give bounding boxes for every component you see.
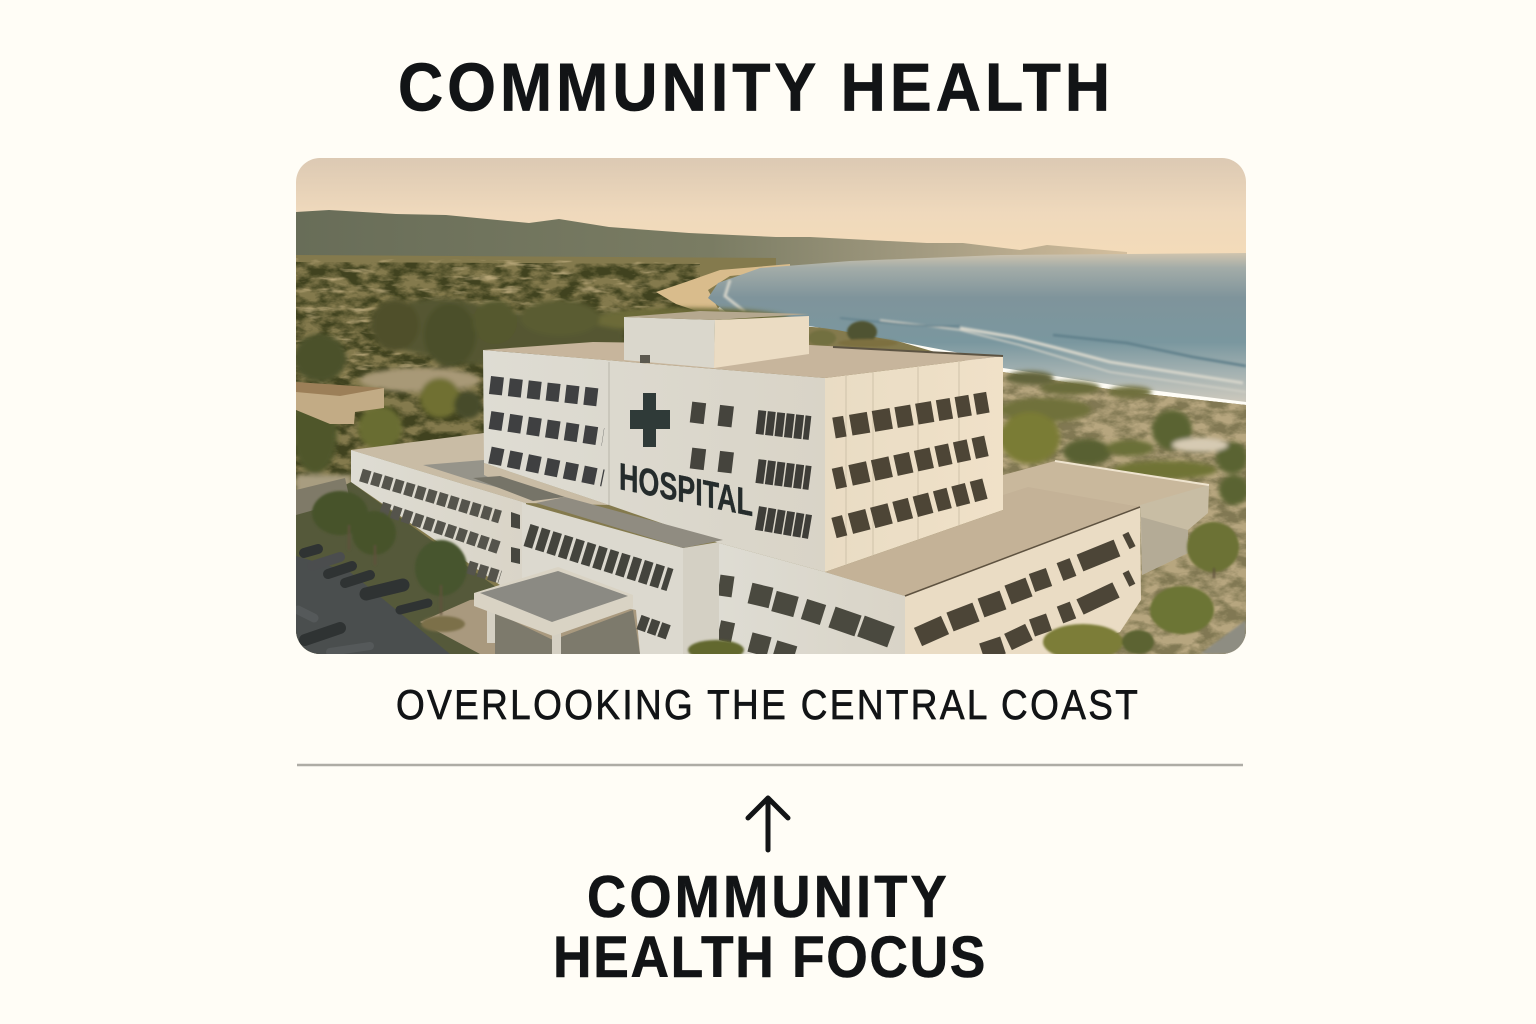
divider line [297, 764, 1243, 766]
parking lot and lawn [296, 478, 640, 654]
title: COMMUNITY HEALTH [398, 49, 1110, 125]
entrance canopy [474, 567, 633, 654]
icon: medical cross [630, 393, 670, 447]
foreground trees [688, 522, 1246, 660]
closing statement [553, 865, 985, 989]
lower right wing [719, 487, 1141, 654]
front entrance block [473, 476, 723, 654]
trees right of hospital [999, 371, 1249, 505]
photo: hospital overlooking the coast [293, 158, 1249, 660]
beach [656, 264, 790, 312]
back right wing [1003, 461, 1209, 575]
main tower: right wall [825, 356, 1003, 572]
arrow pointing up [748, 798, 788, 850]
sky [296, 158, 1246, 254]
main tower: roof [483, 342, 1003, 378]
trees behind rooftop [808, 321, 898, 347]
subtitle: OVERLOOKING THE CENTRAL COAST [396, 682, 1138, 729]
right wall windows [918, 539, 1132, 652]
sea [708, 253, 1246, 402]
left wing [351, 433, 609, 595]
closing statement: COMMUNITY [587, 865, 947, 931]
town mottling: trees [296, 262, 700, 490]
town mottling: rooftops [296, 258, 700, 384]
land right of hospital [1003, 372, 1246, 654]
distant hills [296, 210, 1127, 270]
small building at left [296, 382, 384, 424]
trees and town behind hospital [293, 299, 790, 510]
left wall windows [719, 585, 891, 654]
trees in front of left wing [312, 491, 467, 632]
surf lines [725, 280, 1246, 392]
left wall window rows [490, 385, 603, 398]
coastal town land [296, 255, 1246, 654]
rooftop penthouse [624, 311, 809, 368]
main tower: left wall [483, 350, 825, 572]
closing statement: HEALTH FOCUS [553, 925, 985, 989]
hospital sign lettering: HOSPITAL [619, 455, 753, 525]
parked cars [298, 549, 428, 652]
